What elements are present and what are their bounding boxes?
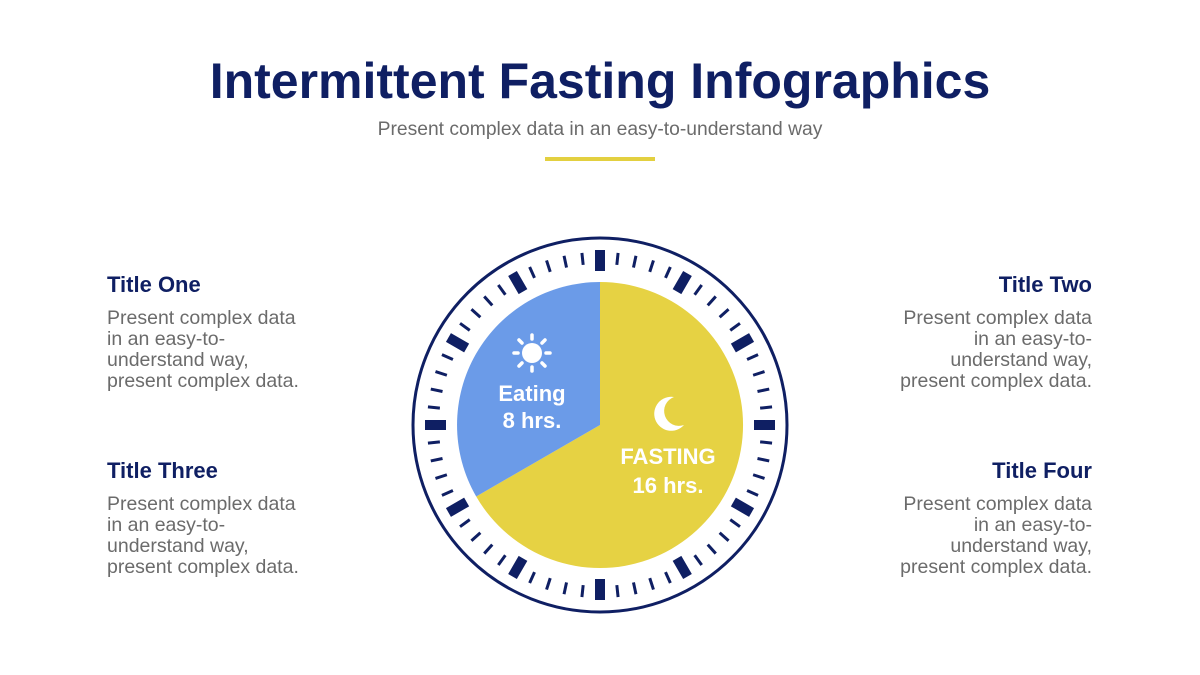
text block: title four: understand way, (950, 535, 1092, 557)
clock face (413, 238, 787, 612)
text block: title two: Present complex data (903, 307, 1092, 329)
text block: title two: present complex data. (900, 370, 1092, 392)
text block: title two: understand way, (950, 349, 1092, 371)
text block: title three (107, 458, 299, 578)
text block: title four: Present complex data (903, 493, 1092, 515)
text block: title one: Present complex data (107, 307, 296, 329)
text block: title one: understand way, (107, 349, 249, 371)
text block: title three: in an easy-to- (107, 514, 225, 536)
text block: title four: in an easy-to- (974, 514, 1092, 536)
text block: title one: Title One (107, 272, 201, 297)
text block: title four: present complex data. (900, 556, 1092, 578)
text block: title three: Present complex data (107, 493, 296, 515)
text block: title three: understand way, (107, 535, 249, 557)
title: Intermittent Fasting Infographics (210, 53, 990, 109)
text block: title three: present complex data. (107, 556, 299, 578)
text block: title one (107, 272, 299, 392)
text block: title two: in an easy-to- (974, 328, 1092, 350)
icon: moon (654, 397, 684, 431)
clock chart: 8 hrs. (503, 408, 561, 433)
label: eating: Eating (498, 381, 566, 406)
pie: fasting (476, 282, 743, 568)
clock chart: 16 hrs. (633, 473, 703, 498)
text block: title two (900, 272, 1092, 392)
text block: title three: Title Three (107, 458, 218, 483)
icon: sun (514, 335, 550, 371)
text block: title two: Title Two (999, 272, 1092, 297)
accent line (545, 157, 655, 161)
pie: eating (457, 282, 600, 496)
text block: title one: present complex data. (107, 370, 299, 392)
text block: title four (900, 458, 1092, 578)
text block: title one: in an easy-to- (107, 328, 225, 350)
subtitle: Present complex data in an easy-to-understand way (378, 119, 822, 140)
text block: title four: Title Four (992, 458, 1092, 483)
label: fasting: FASTING (620, 444, 716, 469)
